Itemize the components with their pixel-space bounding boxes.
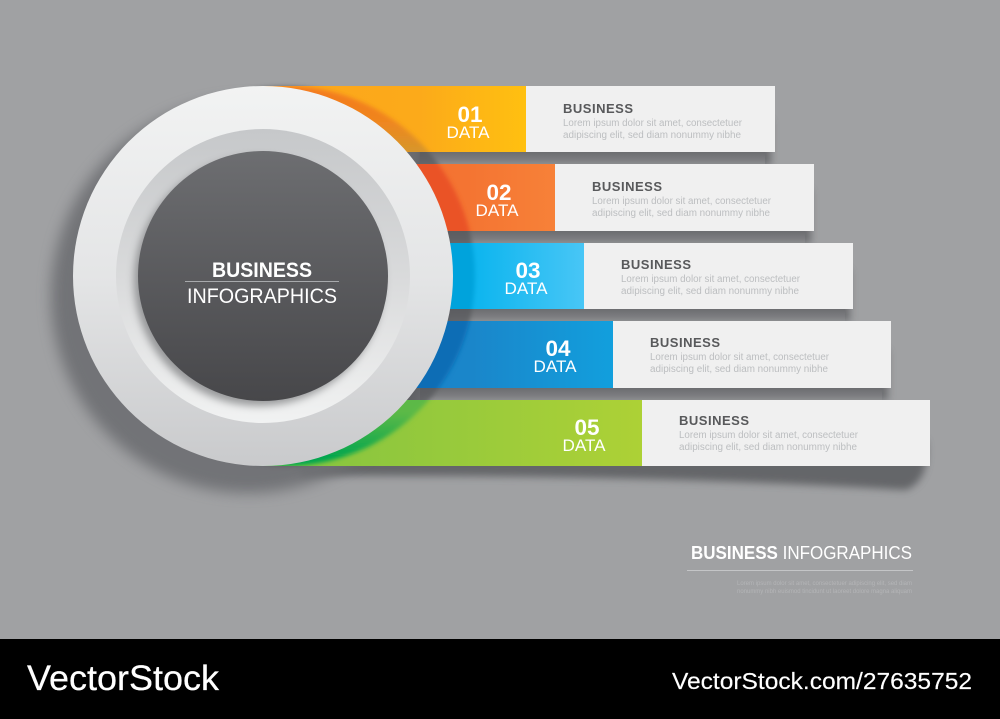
heading: BUSINESS: [592, 179, 662, 194]
bottom right caption: [687, 543, 913, 595]
heading: BUSINESS: [621, 257, 691, 272]
bar 1: [260, 86, 775, 152]
description: adipiscing elit, sed diam nonummy nibhe: [563, 130, 741, 141]
description: [679, 430, 859, 453]
description: adipiscing elit, sed diam nonummy nibhe: [650, 364, 828, 375]
number 03: 03: [516, 258, 540, 283]
heading: BUSINESS: [679, 413, 749, 428]
outer ring: [73, 86, 453, 466]
number 01: 01: [458, 102, 482, 127]
text panel 2: [555, 164, 814, 231]
description: Lorem ipsum dolor sit amet, consectetuer: [679, 430, 859, 441]
number 05: 05: [574, 415, 600, 440]
text panel 1: [526, 86, 775, 152]
description: adipiscing elit, sed diam nonummy nibhe: [679, 442, 857, 453]
number 04: 04: [546, 336, 571, 361]
caption title: BUSINESS INFOGRAPHICS: [691, 543, 912, 563]
description: Lorem ipsum dolor sit amet, consectetuer: [563, 118, 743, 129]
colour band 4: [416, 321, 613, 388]
description: [563, 118, 743, 141]
heading: BUSINESS: [563, 101, 633, 116]
url: VectorStock.com/27635752: [672, 668, 972, 694]
bar 4: [416, 321, 891, 388]
drop shadows: [51, 86, 927, 493]
bar 5: [260, 400, 930, 466]
dark disc: [138, 151, 388, 401]
description: adipiscing elit, sed diam nonummy nibhe: [592, 208, 770, 219]
caption body: [737, 580, 912, 595]
label DATA: DATA: [534, 357, 577, 376]
description: adipiscing elit, sed diam nonummy nibhe: [621, 286, 799, 297]
label DATA: DATA: [562, 436, 606, 455]
heading: BUSINESS: [650, 335, 720, 350]
description: Lorem ipsum dolor sit amet, consectetuer: [621, 274, 801, 285]
colour band 5: [260, 400, 642, 466]
number 02: 02: [486, 180, 512, 205]
caption body: Lorem ipsum dolor sit amet, consectetuer adipiscing elit, sed diam: [737, 580, 912, 587]
disc title: INFOGRAPHICS: [187, 285, 337, 308]
text panel 4: [613, 321, 891, 388]
description: [621, 274, 801, 297]
label DATA: DATA: [476, 201, 519, 220]
colour band 2: [416, 164, 555, 231]
colour band 1: [260, 86, 526, 152]
description: Lorem ipsum dolor sit amet, consectetuer: [650, 352, 830, 363]
text panel 3: [584, 243, 853, 309]
description: [650, 352, 830, 375]
bar 2: [416, 164, 814, 231]
label DATA: DATA: [446, 123, 490, 142]
central circle: [73, 86, 453, 466]
footer bar: [0, 639, 1000, 719]
colour band 3: [450, 243, 584, 309]
bar 3: [450, 243, 853, 309]
brand: VectorStock: [27, 659, 220, 698]
disc title: BUSINESS: [212, 259, 312, 282]
text panel 5: [642, 400, 930, 466]
caption body: nonummy nibh euismod tincidunt ut laoreet dolore magna aliquam: [737, 588, 912, 595]
disc title: [185, 259, 339, 308]
description: Lorem ipsum dolor sit amet, consectetuer: [592, 196, 772, 207]
description: [592, 196, 772, 219]
dark disc shadow: [134, 156, 384, 406]
inner ring: [116, 129, 410, 423]
label DATA: DATA: [504, 279, 548, 298]
